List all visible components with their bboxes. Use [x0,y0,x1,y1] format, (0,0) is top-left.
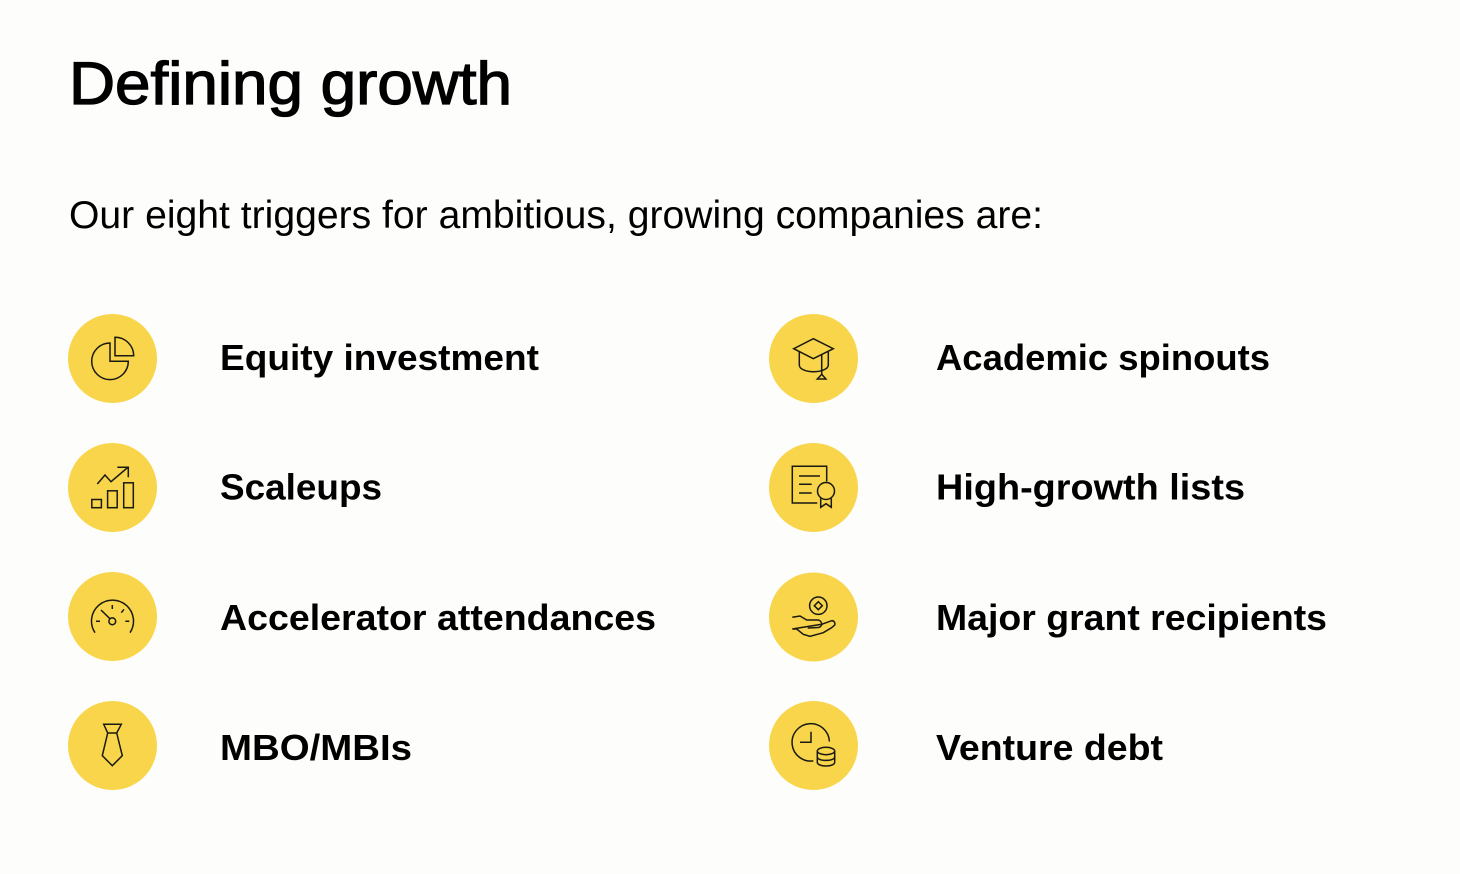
title: Defining growth [69,50,512,117]
icon: growth bars [92,467,133,508]
trigger: scaleups [68,443,382,532]
icon: graduation cap [794,339,833,379]
label: venture debt: Venture debt [936,727,1163,768]
icon: speedometer [92,600,134,633]
label: MBO/MBIs: MBO/MBIs [220,727,412,768]
icon: necktie [102,724,122,766]
label: equity investment: Equity investment [220,337,539,378]
label: accelerator attendances: Accelerator attendances [220,597,656,638]
icon: hand with coin [792,597,835,636]
icon: certificate [792,466,834,507]
trigger: major grant recipients [769,572,1327,662]
icon: pie chart [92,337,134,380]
trigger: accelerator attendances [68,572,656,661]
label: high-growth lists: High-growth lists [936,466,1245,508]
trigger: venture debt [769,701,1163,790]
label: scaleups: Scaleups [220,466,382,508]
trigger: equity investment [68,314,539,403]
trigger: academic spinouts [769,314,1270,403]
label: major grant recipients: Major grant recipients [936,597,1327,638]
intro text: Our eight triggers for ambitious, growing companies are: [69,194,1043,237]
trigger: MBO/MBIs [68,701,412,790]
trigger: high-growth lists [769,443,1245,532]
label: academic spinouts: Academic spinouts [936,337,1270,378]
icon: clock and coins [792,724,835,766]
